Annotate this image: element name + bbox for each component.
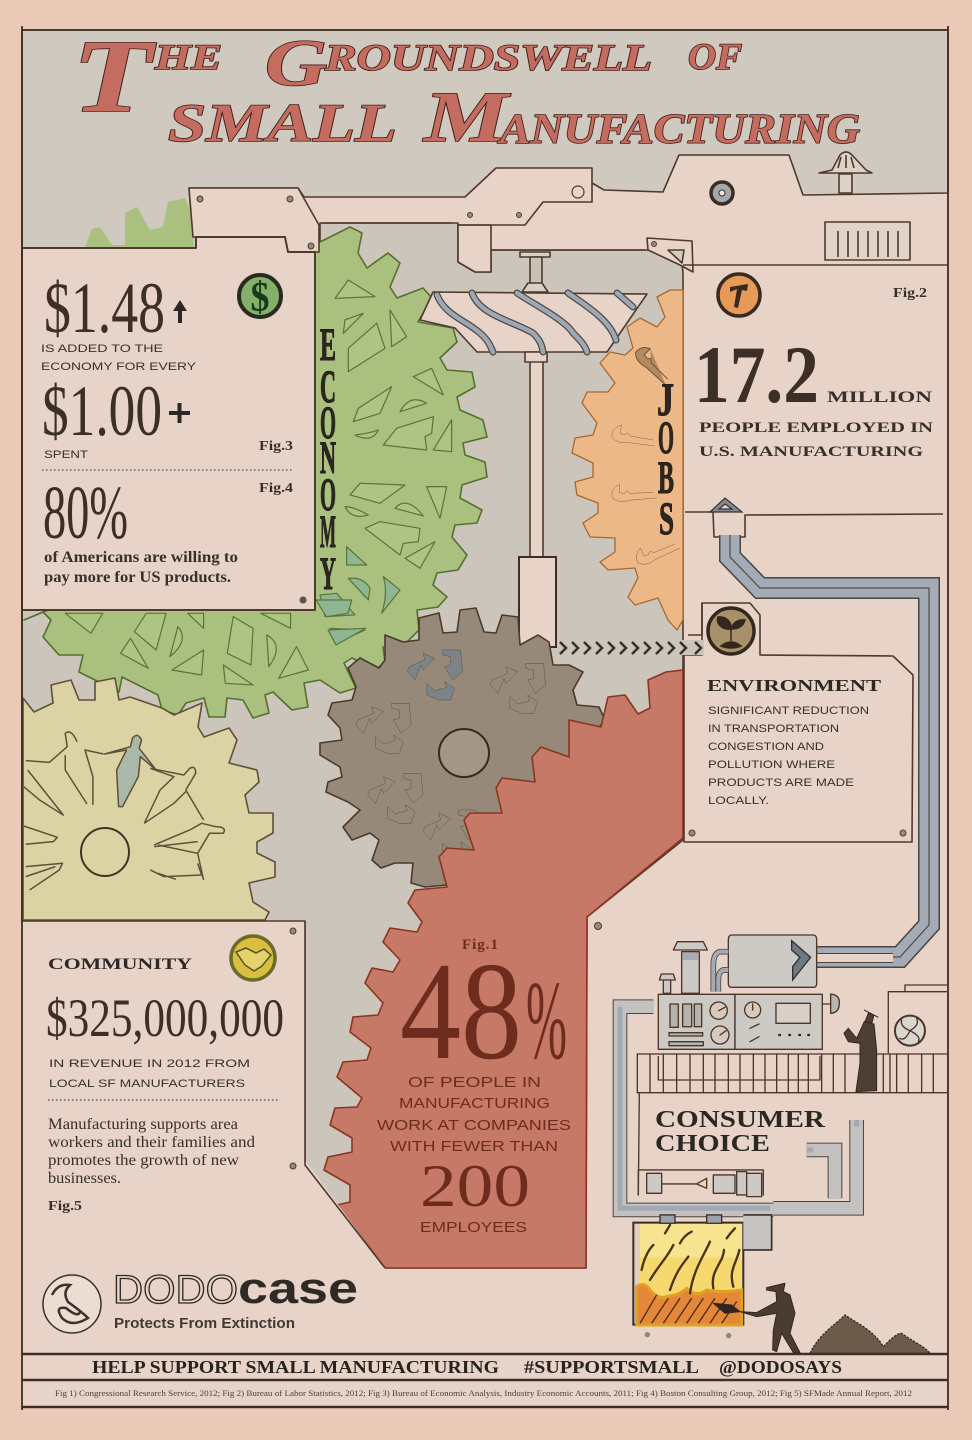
heading: COMMUNITY [48, 956, 193, 973]
pipe from jobs to boiler [730, 535, 929, 962]
connector pipe [713, 952, 728, 992]
drill press screw [420, 252, 647, 362]
number 200: 200 [420, 1153, 530, 1219]
blue thread [437, 293, 633, 352]
gear: environment (recycling) [320, 608, 605, 887]
gray back wall [22, 223, 683, 1268]
fan box [888, 985, 947, 1053]
caption: willing to pay: of Americans are willing to [44, 549, 238, 566]
corner bracket [647, 238, 693, 272]
text: M [320, 506, 336, 558]
arm of the press [458, 225, 491, 272]
body text [708, 705, 869, 807]
icon: dollar coin: $ [250, 275, 270, 321]
gear cut-outs upper [320, 280, 452, 640]
stat: 1.00: $1.00 [42, 371, 162, 451]
call to action [92, 1357, 842, 1377]
caption: revenue [49, 1058, 250, 1090]
sources: Fig 1) Congressional Research Service, 2012; Fig 2) Bureau of Labor Statistics, 2012; Fig 3) Bureau of Economic Analysis, Industry Economic Accounts, 2011; Fig 4) Boston Consulting Group, 2012; Fig 5) SFMade Annual Report, 2012 [55, 1388, 912, 1398]
wordmark: DODO [113, 1268, 238, 1312]
cable [636, 1093, 641, 1195]
panel: red gear, 48 percent [324, 670, 683, 1268]
heading: ENVIRONMENT [707, 676, 882, 695]
body text [48, 1116, 255, 1187]
green gear tip above panel [85, 198, 194, 247]
person on platform [844, 1010, 878, 1092]
heading: consumer choice: CONSUMER [655, 1107, 826, 1133]
icon: hammer coin [718, 274, 760, 316]
panel: red gear, 48 percent: % [526, 959, 567, 1083]
body text: promotes the growth of new [48, 1152, 240, 1169]
column and base of drill press [519, 358, 556, 647]
wall grate [825, 222, 910, 260]
railing [637, 1054, 947, 1093]
million: MILLION [827, 389, 933, 406]
heading: consumer choice [655, 1107, 826, 1157]
panel: jobs text [683, 265, 948, 537]
big number: 48 [400, 934, 522, 1089]
stat: 17.2: 17.2 [694, 329, 819, 420]
logo: dodocase [43, 1264, 358, 1333]
ring of people [24, 732, 224, 890]
furnace [633, 1215, 772, 1338]
tank [728, 935, 817, 987]
figure reference 3: Fig.3 [259, 439, 293, 454]
label: jobs: B [658, 452, 674, 504]
chevron trail [560, 642, 701, 654]
gear: economy [24, 227, 487, 718]
body text: POLLUTION WHERE [708, 759, 835, 771]
gear cut-outs lower [65, 600, 366, 685]
caption: revenue: LOCAL SF MANUFACTURERS [49, 1078, 245, 1090]
text: C [320, 361, 336, 413]
title: T [72, 19, 156, 134]
text: Y [320, 548, 336, 600]
caption: WITH FEWER THAN [390, 1138, 558, 1155]
title: SMALL [168, 93, 397, 153]
pipe lower edge [322, 183, 645, 250]
body text: LOCALLY. [708, 795, 769, 807]
main return pipe [620, 1007, 857, 1210]
caption [377, 1074, 571, 1155]
icon: pipe vent [710, 498, 742, 512]
employees: EMPLOYEES [420, 1219, 527, 1236]
caption: PEOPLE EMPLOYED IN [699, 420, 933, 436]
body text: PRODUCTS ARE MADE [708, 777, 854, 789]
caption: WORK AT COMPANIES [377, 1117, 571, 1134]
call to action: #SUPPORTSMALL [524, 1357, 699, 1377]
title [72, 19, 860, 157]
caption: OF PEOPLE IN [408, 1074, 541, 1091]
icon: up arrow [173, 300, 187, 323]
title: G [265, 27, 327, 100]
icon: dollar coin [239, 275, 281, 321]
text: N [320, 432, 336, 484]
figure reference 2: Fig.2 [893, 286, 927, 301]
caption: spent: SPENT [44, 449, 88, 461]
tagline: Protects From Extinction [114, 1315, 295, 1332]
caption: U.S. MANUFACTURING [699, 444, 923, 460]
body text: SIGNIFICANT REDUCTION [708, 705, 869, 717]
coal piles [810, 1315, 930, 1353]
hub [439, 729, 489, 777]
caption: willing to pay: pay more for US products. [44, 569, 231, 586]
label: jobs: S [659, 493, 674, 545]
logo: dodocase: case [238, 1264, 358, 1313]
gray sky behind the machinery [22, 30, 948, 248]
coal hatching [640, 1295, 737, 1323]
caption [699, 420, 933, 460]
recycling arrows [356, 650, 546, 860]
stat: 1.48: $1.48 [44, 268, 165, 348]
title: OF [688, 37, 742, 78]
flame licks [642, 1225, 739, 1293]
figure reference 4: Fig.4 [259, 481, 293, 496]
body text: CONGESTION AND [708, 741, 824, 753]
gear: community [23, 678, 275, 920]
stat: 80 percent: 80% [43, 471, 128, 555]
figure reference: Fig.1 [462, 937, 498, 953]
text: O [320, 397, 336, 449]
gear: jobs: O [658, 412, 674, 464]
title: HE [154, 37, 222, 77]
call to action: HELP SUPPORT SMALL MANUFACTURING [92, 1357, 499, 1377]
call to action: @DODOSAYS [719, 1357, 842, 1377]
caption: added to the economy: IS ADDED TO THE [41, 343, 163, 355]
caption: added to the economy: ECONOMY FOR EVERY [41, 361, 197, 373]
heading: consumer choice: CHOICE [655, 1131, 770, 1157]
caption: willing to pay [44, 549, 238, 586]
icon: plus [169, 403, 190, 423]
label: economy [320, 319, 336, 600]
figure reference 5: Fig.5 [48, 1199, 82, 1214]
hub [81, 828, 129, 876]
body text: Manufacturing supports area [48, 1116, 238, 1133]
title: M [423, 77, 512, 157]
panel: community [22, 921, 385, 1355]
gear: jobs [572, 290, 683, 630]
stoker with shovel [713, 1283, 800, 1353]
icon: porthole [711, 182, 733, 204]
panel: environment [560, 603, 913, 842]
panel bracket [189, 188, 319, 252]
smokestack [659, 942, 707, 993]
title: ANUFACTURING [497, 107, 860, 153]
caption: revenue: IN REVENUE IN 2012 FROM [49, 1058, 250, 1070]
shaft [520, 252, 550, 292]
machine: boiler, furnace and pipes [620, 935, 947, 1353]
flame layer [637, 1285, 742, 1325]
body text: workers and their families and [48, 1134, 255, 1151]
control panels [658, 994, 839, 1049]
caption: added to the economy [41, 343, 197, 373]
panel: economy [22, 237, 315, 610]
caption: MANUFACTURING [399, 1095, 550, 1112]
roof vent [819, 152, 872, 193]
wrenches [610, 343, 680, 571]
title: ROUNDSWELL [324, 38, 652, 79]
body text: businesses. [48, 1170, 121, 1187]
footer [22, 1353, 948, 1407]
piston [638, 1170, 763, 1197]
screws [365, 212, 602, 1268]
body text: IN TRANSPORTATION [708, 723, 839, 735]
text: O [320, 469, 336, 521]
stat: revenue: $325,000,000 [46, 988, 284, 1048]
icon: handshake coin [231, 936, 275, 980]
label: jobs [657, 374, 674, 545]
label: economy: E [320, 319, 336, 371]
icon: seedling coin [708, 608, 754, 654]
roof machinery [322, 152, 910, 260]
dodo emblem [43, 1275, 101, 1333]
label: jobs: J [657, 374, 674, 426]
